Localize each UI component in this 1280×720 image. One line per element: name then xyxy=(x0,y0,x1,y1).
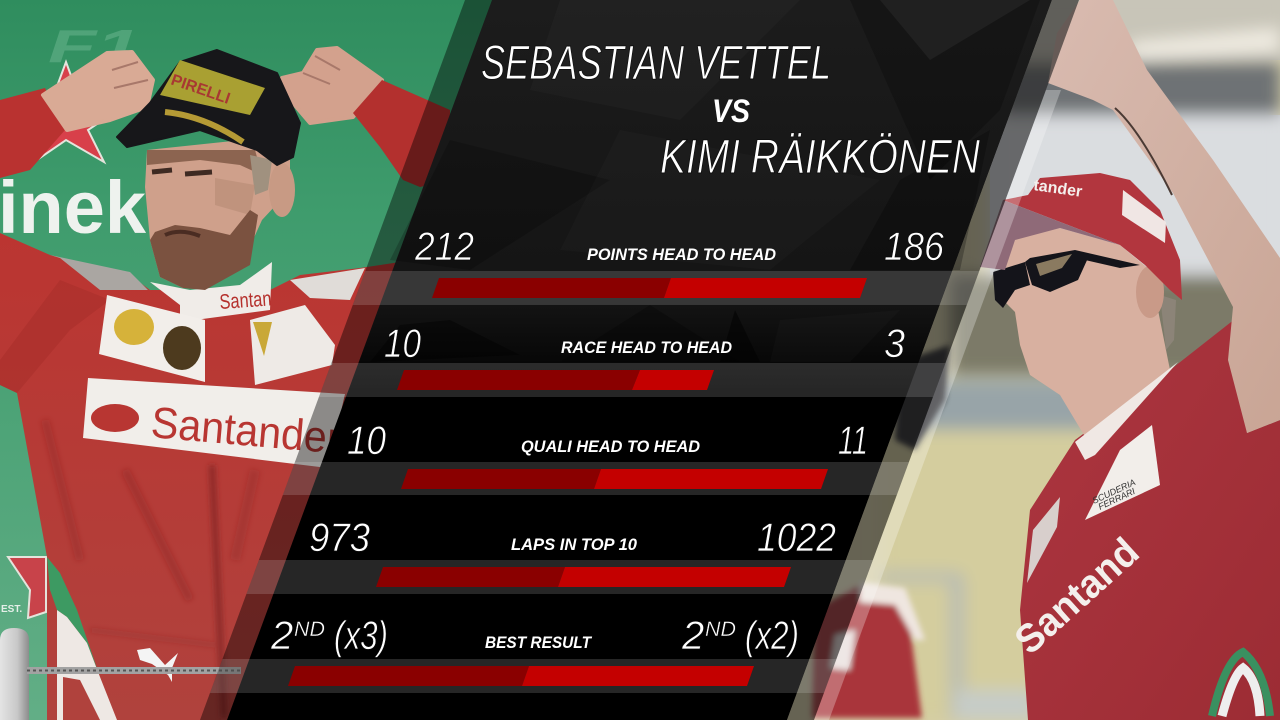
row band xyxy=(283,462,909,495)
title: Vettel: SEBASTIAN VETTEL xyxy=(481,37,831,90)
eyes xyxy=(152,170,212,174)
cap: PIRELLI xyxy=(169,72,232,108)
row label: LAPS IN TOP 10 xyxy=(511,535,638,554)
Santander chest band: Santander xyxy=(149,398,343,464)
Vettel bar xyxy=(397,370,640,390)
Heineken star xyxy=(20,62,118,162)
sleeve badge xyxy=(1027,497,1060,583)
Scuderia Ferrari badge xyxy=(1085,425,1160,520)
Räikkönen value xyxy=(681,614,799,658)
Räikkönen bar xyxy=(594,469,828,489)
Heineken lettering: inek xyxy=(0,166,147,249)
hair xyxy=(1160,295,1176,350)
row band xyxy=(246,560,873,594)
Vettel bar xyxy=(432,278,671,298)
cap sponsor: tander xyxy=(1032,177,1083,201)
raised arm xyxy=(1048,0,1280,433)
row band xyxy=(210,659,836,693)
photo: Sebastian Vettel on the podium xyxy=(0,0,520,720)
Räikkönen bar xyxy=(664,278,867,298)
blurred track background xyxy=(780,0,1280,720)
cheek shadow xyxy=(215,178,255,215)
row: quali head to head xyxy=(283,419,909,495)
tricolour leg stripe xyxy=(47,557,117,720)
background mechanic xyxy=(812,345,950,718)
unblurred base of the track background xyxy=(780,0,1280,720)
barrier post and cable xyxy=(0,628,241,720)
face and neck xyxy=(1003,228,1170,445)
ear xyxy=(269,163,295,217)
Vettel value: 10 xyxy=(347,419,386,463)
Shell badge xyxy=(99,295,205,382)
arm tattoo xyxy=(1115,108,1172,195)
cap xyxy=(980,173,1182,300)
Scuderia Ferrari badge: SCUDERIA xyxy=(1091,477,1137,506)
Vettel value: 973 xyxy=(309,516,370,560)
row: best result xyxy=(210,614,836,693)
Vettel bar xyxy=(288,666,529,686)
title: Räikkönen: KIMI RÄIKKÖNEN xyxy=(660,131,980,184)
Vettel value: 2 xyxy=(270,614,293,658)
Scuderia Ferrari badge: FERRARI xyxy=(1097,486,1137,512)
Vettel value: 212 xyxy=(414,225,474,269)
Räikkönen bar xyxy=(558,567,791,587)
Puma logo xyxy=(137,648,178,682)
translucent left edge band xyxy=(200,0,500,720)
Räikkönen's shirt xyxy=(1020,315,1280,720)
row: race head to head xyxy=(319,322,945,397)
Räikkönen bar xyxy=(522,666,754,686)
F1 logo watermark: F1 xyxy=(48,20,140,72)
race suit xyxy=(0,233,400,720)
ear xyxy=(1136,266,1164,318)
Räikkönen value: 11 xyxy=(838,419,868,463)
Vettel bar xyxy=(376,567,565,587)
row: laps in top 10 xyxy=(246,516,873,594)
Santander shirt lettering: Santand xyxy=(1007,530,1147,663)
Vettel value: (x3) xyxy=(334,614,388,658)
row label: QUALI HEAD TO HEAD xyxy=(521,437,700,456)
Räikkönen bar xyxy=(632,370,714,390)
tricolour shoulder badge xyxy=(1212,652,1270,716)
neck and collar xyxy=(150,262,272,322)
right sleeve and arm xyxy=(282,48,450,187)
photo: Kimi Räikkönen waving xyxy=(780,0,1280,720)
panel: dark central background xyxy=(227,0,1052,720)
suit folds xyxy=(45,420,255,718)
left sleeve and arm xyxy=(0,52,153,178)
row band xyxy=(319,363,945,397)
row label: RACE HEAD TO HEAD xyxy=(561,338,732,357)
row band xyxy=(353,271,979,305)
Vettel value: 10 xyxy=(384,322,421,366)
low-poly texture xyxy=(370,0,1040,362)
lower banner lettering: EST. xyxy=(1,604,22,615)
face xyxy=(145,135,295,290)
mouth xyxy=(165,232,200,236)
laurel xyxy=(165,112,243,142)
cap xyxy=(117,50,300,165)
Räikkönen value: 1022 xyxy=(757,516,836,560)
beard xyxy=(150,210,258,290)
Räikkönen value: 2 xyxy=(681,614,704,658)
lower Heineken star xyxy=(8,557,46,618)
Ferrari chest badge xyxy=(250,305,335,385)
title: vs: VS xyxy=(712,93,751,129)
Räikkönen value: 3 xyxy=(884,322,905,366)
translucent right edge bands xyxy=(787,0,1079,720)
Räikkönen value: (x2) xyxy=(745,614,799,658)
Santander chest band xyxy=(83,378,345,468)
Pirelli patch xyxy=(160,60,265,115)
row label: POINTS HEAD TO HEAD xyxy=(587,245,776,264)
Vettel value: ND xyxy=(294,618,325,641)
Vettel value xyxy=(270,614,388,658)
Räikkönen value: 186 xyxy=(884,225,945,269)
Vettel bar xyxy=(401,469,601,489)
collar sponsor: Santan xyxy=(219,287,272,314)
hair xyxy=(250,155,272,195)
sunglasses xyxy=(993,250,1140,308)
row: points head to head xyxy=(353,225,979,305)
collar xyxy=(1075,362,1178,460)
Räikkönen value: ND xyxy=(705,618,736,641)
row label: BEST RESULT xyxy=(485,633,592,652)
